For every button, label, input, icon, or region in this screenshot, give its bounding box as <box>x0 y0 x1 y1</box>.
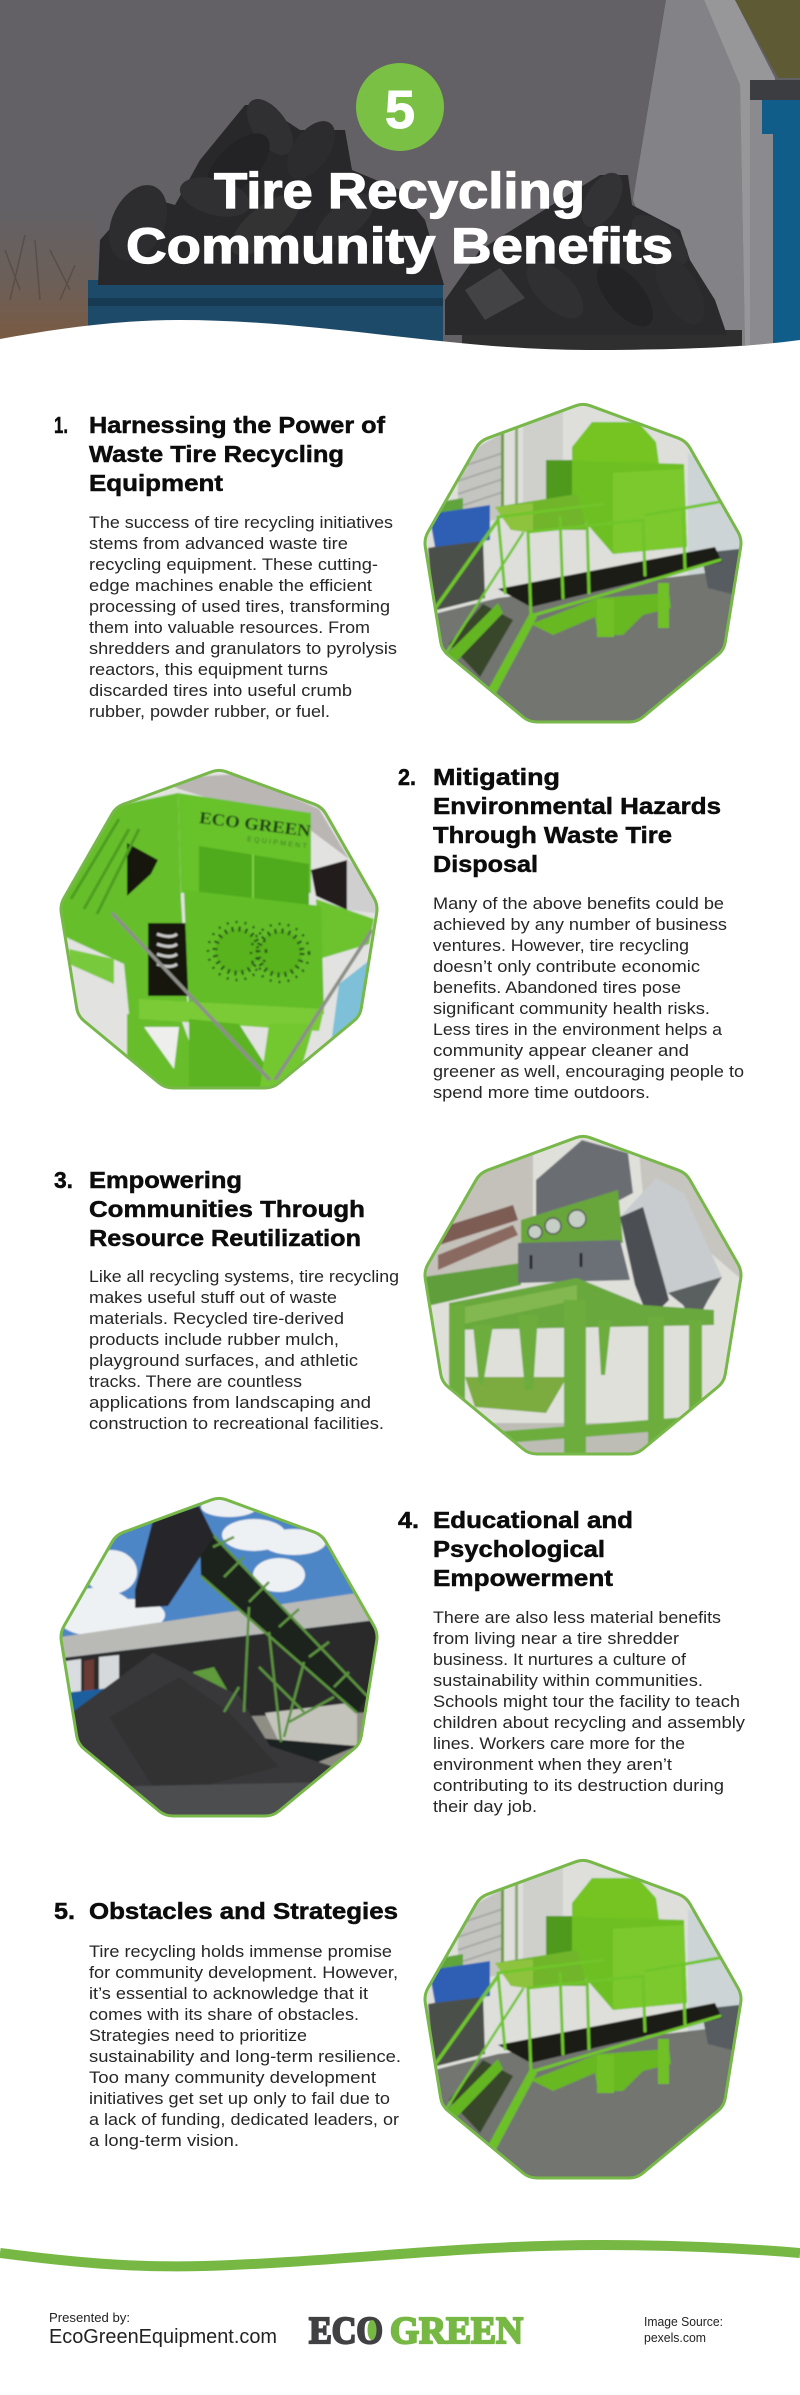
presented by <box>49 2310 277 2348</box>
section 2 heading: Through Waste Tire <box>433 822 672 848</box>
header photo: tires on trailers <box>0 0 800 352</box>
title <box>126 163 673 274</box>
image source: pexels.com <box>644 2330 706 2345</box>
footer <box>0 2245 800 2352</box>
presented by: EcoGreenEquipment.com <box>49 2326 277 2348</box>
section 1 body text: The success of tire recycling initiatives <box>89 514 393 532</box>
section 1 body text: shredders and granulators to pyrolysis <box>89 640 397 658</box>
section 1 body text: rubber, powder rubber, or fuel. <box>89 703 330 721</box>
section 2 body text: Many of the above benefits could be <box>433 895 724 913</box>
section 4 image: crumb rubber pile and conveyor <box>54 1492 384 1822</box>
section 3 body text: tracks. There are countless <box>89 1373 302 1391</box>
section 3 body text: construction to recreational facilities. <box>89 1415 384 1433</box>
section 2 heading <box>398 764 721 877</box>
section 3 body text: makes useful stuff out of waste <box>89 1289 337 1307</box>
section 1 body text: processing of used tires, transforming <box>89 598 390 616</box>
section 1 body text: recycling equipment. These cutting- <box>89 556 378 574</box>
section 1 heading: 1. <box>54 412 68 438</box>
section 4 heading: Empowerment <box>433 1565 613 1591</box>
section 2 image: Eco Green shredder front <box>54 764 384 1094</box>
image source <box>644 2314 723 2345</box>
section 3 body text: Like all recycling systems, tire recycling <box>89 1268 399 1286</box>
section 1 heading: Harnessing the Power of <box>89 412 385 438</box>
section 2 body text: doesn’t only contribute economic <box>433 958 700 976</box>
section 2 <box>54 764 744 1102</box>
section 5 <box>54 1854 748 2184</box>
section 2 body text: ventures. However, tire recycling <box>433 937 689 955</box>
section 5 body text <box>89 1943 401 2150</box>
section 2 heading: 2. <box>398 764 416 790</box>
section 5 body text: a lack of funding, dedicated leaders, or <box>89 2111 400 2129</box>
section 4 body text: their day job. <box>433 1798 537 1816</box>
section 3 <box>54 1130 748 1463</box>
section 5 body text: Strategies need to prioritize <box>89 2027 307 2045</box>
section 5 body text: it’s essential to acknowledge that it <box>89 1985 368 2003</box>
section 5 body text: sustainability and long-term resilience. <box>89 2048 401 2066</box>
section 4 body text <box>433 1609 746 1816</box>
number badge <box>356 63 444 151</box>
section 4 body text: environment when they aren’t <box>433 1756 672 1774</box>
white wave divider <box>0 320 800 400</box>
section 3 heading: Empowering <box>89 1167 242 1193</box>
section 2 heading: Environmental Hazards <box>433 793 721 819</box>
section 3 image: grey and green granulator on stand <box>418 1130 748 1463</box>
logo: Eco Green: ECO <box>309 2310 383 2352</box>
section 1 heading: Waste Tire Recycling <box>89 441 344 467</box>
section 3 body text: applications from landscaping and <box>89 1394 371 1412</box>
section 2 body text: community appear cleaner and <box>433 1042 689 1060</box>
section 5 body text: a long-term vision. <box>89 2132 239 2150</box>
section 1 <box>54 398 748 728</box>
section 5 heading: Obstacles and Strategies <box>89 1898 398 1924</box>
section 4 body text: from living near a tire shredder <box>433 1630 680 1648</box>
section 3 body text <box>89 1268 399 1433</box>
section 1 body text: reactors, this equipment turns <box>89 661 328 679</box>
section 5 body text: comes with its share of obstacles. <box>89 2006 359 2024</box>
section 2 body text: significant community health risks. <box>433 1000 710 1018</box>
section 2 body text: benefits. Abandoned tires pose <box>433 979 681 997</box>
footer green wave <box>0 2245 800 2266</box>
section 5 body text: initiatives get set up only to fail due to <box>89 2090 390 2108</box>
header banner <box>0 0 800 400</box>
section 2 body text <box>433 895 744 1102</box>
section 3 heading: Resource Reutilization <box>89 1225 361 1251</box>
section 1 body text: them into valuable resources. From <box>89 619 370 637</box>
section 4 heading <box>398 1507 633 1591</box>
section 4 heading: 4. <box>398 1507 419 1533</box>
number badge: 5 <box>385 80 415 140</box>
image source: Image Source: <box>644 2314 723 2329</box>
machine logo lettering: ECO GREEN <box>198 808 313 841</box>
section 3 body text: products include rubber mulch, <box>89 1331 339 1349</box>
section 4 body text: children about recycling and assembly <box>433 1714 746 1732</box>
section 4 body text: sustainability within communities. <box>433 1672 703 1690</box>
section 5 heading: 5. <box>54 1898 75 1924</box>
title: Community Benefits <box>126 218 673 274</box>
section 1 body text: discarded tires into useful crumb <box>89 682 352 700</box>
section 2 heading: Disposal <box>433 851 538 877</box>
section 3 body text: materials. Recycled tire-derived <box>89 1310 344 1328</box>
section 5 body text: Too many community development <box>89 2069 377 2087</box>
section 4 body text: There are also less material benefits <box>433 1609 721 1627</box>
section 1 heading <box>54 412 385 496</box>
section 2 heading: Mitigating <box>433 764 560 790</box>
machine logo lettering: EQUIPMENT <box>247 836 308 850</box>
section 4 body text: lines. Workers care more for the <box>433 1735 685 1753</box>
section 3 heading <box>54 1167 365 1251</box>
section 2 body text: spend more time outdoors. <box>433 1084 650 1102</box>
section 5 image: green shredder with walkway <box>418 1854 748 2184</box>
section 1 heading: Equipment <box>89 470 223 496</box>
machine logo lettering <box>198 811 312 848</box>
section 4 body text: business. It nurtures a culture of <box>433 1651 686 1669</box>
section 4 body text: contributing to its destruction during <box>433 1777 724 1795</box>
section 2 body text: achieved by any number of business <box>433 916 727 934</box>
section 1 body text: stems from advanced waste tire <box>89 535 348 553</box>
section 4 body text: Schools might tour the facility to teach <box>433 1693 740 1711</box>
section 3 body text: playground surfaces, and athletic <box>89 1352 358 1370</box>
section 1 body text <box>89 514 397 721</box>
section 3 heading: Communities Through <box>89 1196 365 1222</box>
section 5 body text: for community development. However, <box>89 1964 398 1982</box>
section 4 heading: Educational and <box>433 1507 633 1533</box>
section 1 image: green shredder with walkway <box>418 398 748 728</box>
presented by: Presented by: <box>49 2310 130 2325</box>
section 4 heading: Psychological <box>433 1536 605 1562</box>
section 1 body text: edge machines enable the efficient <box>89 577 372 595</box>
logo: Eco Green <box>309 2310 523 2352</box>
section 2 body text: Less tires in the environment helps a <box>433 1021 723 1039</box>
section 5 body text: Tire recycling holds immense promise <box>89 1943 392 1961</box>
section 3 heading: 3. <box>54 1167 73 1193</box>
title: Tire Recycling <box>214 163 585 219</box>
section 4 <box>54 1492 746 1822</box>
logo: Eco Green: GREEN <box>390 2310 523 2352</box>
section 2 body text: greener as well, encouraging people to <box>433 1063 744 1081</box>
